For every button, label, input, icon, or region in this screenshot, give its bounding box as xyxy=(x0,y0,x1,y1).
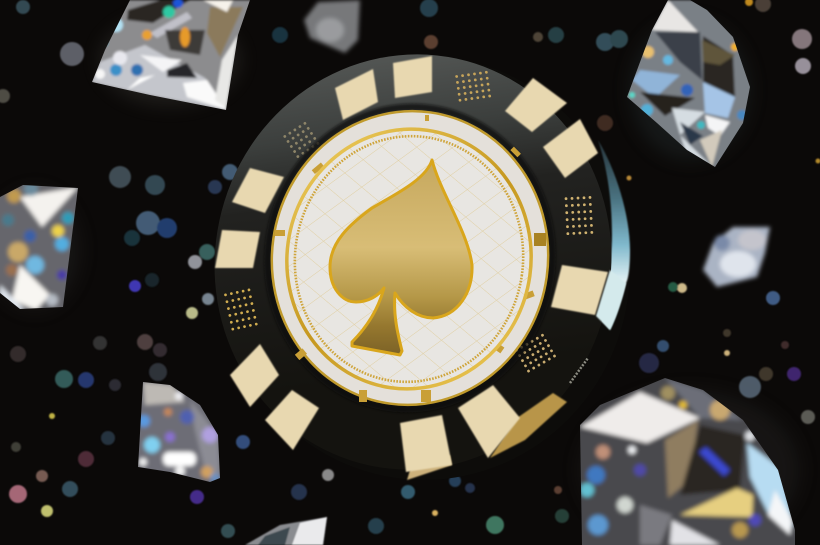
dots left xyxy=(226,290,257,329)
ring notches xyxy=(275,115,546,402)
stripe left xyxy=(215,230,260,268)
diamond: top left xyxy=(92,0,250,110)
diamond: bottom center xyxy=(245,517,327,545)
chip cyan reflective rim xyxy=(595,140,630,330)
beaded gold ring xyxy=(279,121,539,397)
diamond: mid right, blurred xyxy=(703,227,770,287)
stripe bottom xyxy=(400,415,452,472)
stripe top xyxy=(393,56,432,98)
edge stripes xyxy=(215,56,608,472)
stripe upper left xyxy=(232,168,284,213)
dots top xyxy=(457,72,494,100)
diamond: top right xyxy=(627,0,750,167)
dots lower right xyxy=(517,335,555,371)
poker chip xyxy=(176,17,650,507)
chip side edge xyxy=(218,56,630,480)
stripe lower left xyxy=(230,344,279,407)
right rim highlight over face xyxy=(596,270,626,330)
stripe bottom left xyxy=(265,390,319,450)
white inner ring xyxy=(253,93,567,423)
gold band on chip side xyxy=(490,393,567,458)
gold spade xyxy=(330,160,472,355)
dots right xyxy=(566,197,596,234)
stripe top left xyxy=(335,69,378,120)
diamond: bottom right xyxy=(575,375,800,545)
diamond: top center, blurred xyxy=(304,0,360,53)
gold medallion ring xyxy=(270,113,548,405)
stripe right xyxy=(551,265,608,315)
side ridge marks xyxy=(570,358,588,383)
diamond: lower left xyxy=(138,382,220,482)
dots top left xyxy=(285,120,323,157)
dark shadow around inner ring xyxy=(248,89,572,427)
stripe bottom right xyxy=(458,385,520,458)
chip face xyxy=(176,17,650,507)
stripe right upper xyxy=(543,119,598,178)
diamond: left xyxy=(0,185,78,309)
gold dot patches xyxy=(226,72,596,371)
stripe top right xyxy=(505,78,567,132)
lower side stripe xyxy=(407,455,452,480)
